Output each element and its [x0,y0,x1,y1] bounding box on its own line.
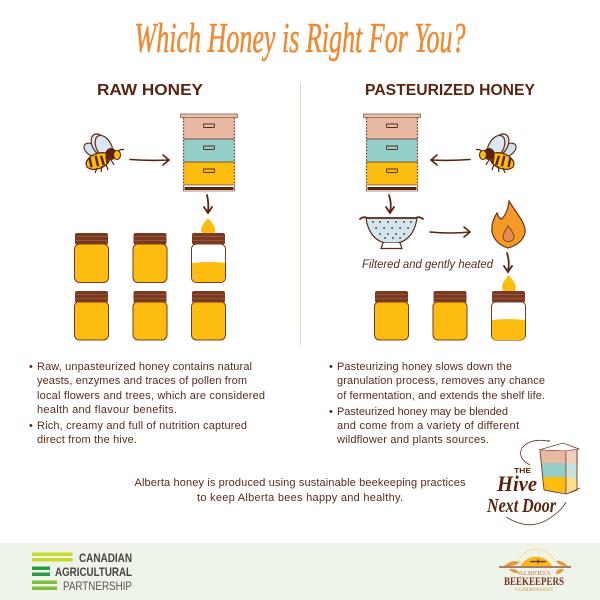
text: pasteurized honey bullets: • [329,361,333,373]
arrow: colander to flame [430,227,470,237]
jars: six honey jars [74,233,226,340]
panel: raw honey [29,82,265,446]
arrow: hive to jar [204,195,212,213]
logo: canadian agricultural partnership: CANADIAN [79,551,132,565]
logo: alberta beekeepers commission: ALBERTA [518,570,551,577]
arrow: hive to colander [386,195,394,213]
closing statement: Alberta honey is produced using sustainable beekeeping practices [134,477,466,489]
icon: honey drop [502,275,516,294]
text: pasteurized honey bullets: Pasteurized honey may be blended [337,406,508,418]
text: raw honey bullets: • [29,420,33,432]
text: pasteurized honey bullets: and come from a variety of different [337,420,519,432]
arrow: bee to hive [130,155,169,165]
logo: the hive next door: Next Door [486,495,556,517]
icon: hive [180,114,238,191]
text: raw honey bullets [29,361,265,446]
heading: pasteurized honey: PASTEURIZED HONEY [365,82,535,99]
divider [300,82,302,345]
logo: canadian agricultural partnership: PARTNERSHIP [63,579,132,593]
arrow: bee to hive [431,155,470,165]
icon: hive [364,114,420,191]
text: pasteurized honey bullets: Pasteurizing honey slows down the [337,361,512,373]
panel: pasteurized honey [329,82,545,446]
logo: alberta beekeepers commission: COMMISSION [515,587,553,593]
closing statement [134,477,466,504]
arrow: flame to jar [504,253,512,272]
logo: the hive next door [486,440,580,525]
closing statement: to keep Alberta bees happy and healthy. [197,492,403,504]
logo: alberta beekeepers commission [499,549,571,593]
icon: colander [360,217,423,248]
text: raw honey bullets: local flowers and trees, which are considered [37,390,265,402]
footer band [0,543,600,600]
text: pasteurized honey bullets: granulation process, removes any chance [337,375,545,387]
text: pasteurized honey bullets: of fermentation, and extends the shelf life. [337,390,545,402]
text: pasteurized honey bullets: • [329,406,333,418]
text: raw honey bullets: Raw, unpasteurized honey contains natural [37,361,252,373]
icon: bee [81,131,124,173]
icon: flame [492,201,525,248]
jars: three honey jars [374,291,526,340]
icon: honey drop [201,218,216,236]
logo: the hive next door: THE [514,466,531,475]
text: raw honey bullets: • [29,361,33,373]
heading: raw honey: RAW HONEY [97,82,203,99]
text: raw honey bullets: direct from the hive. [37,434,137,446]
text: raw honey bullets: yeasts, enzymes and traces of pollen from [37,375,247,387]
logo: canadian agricultural partnership: AGRICULTURAL [55,565,132,579]
text: raw honey bullets: Rich, creamy and full of nutrition captured [37,420,247,432]
logo: canadian agricultural partnership [32,551,132,593]
logo: the hive next door: Hive [496,471,537,496]
text: raw honey bullets: health and flavour benefits. [37,404,177,416]
logo: alberta beekeepers commission: BEEKEEPERS [504,574,564,588]
caption: filtered and gently heated: Filtered and gently heated [362,259,494,271]
icon: bee [476,131,519,173]
text: pasteurized honey bullets [329,361,545,446]
text: pasteurized honey bullets: wildflower and plants sources. [336,434,489,446]
